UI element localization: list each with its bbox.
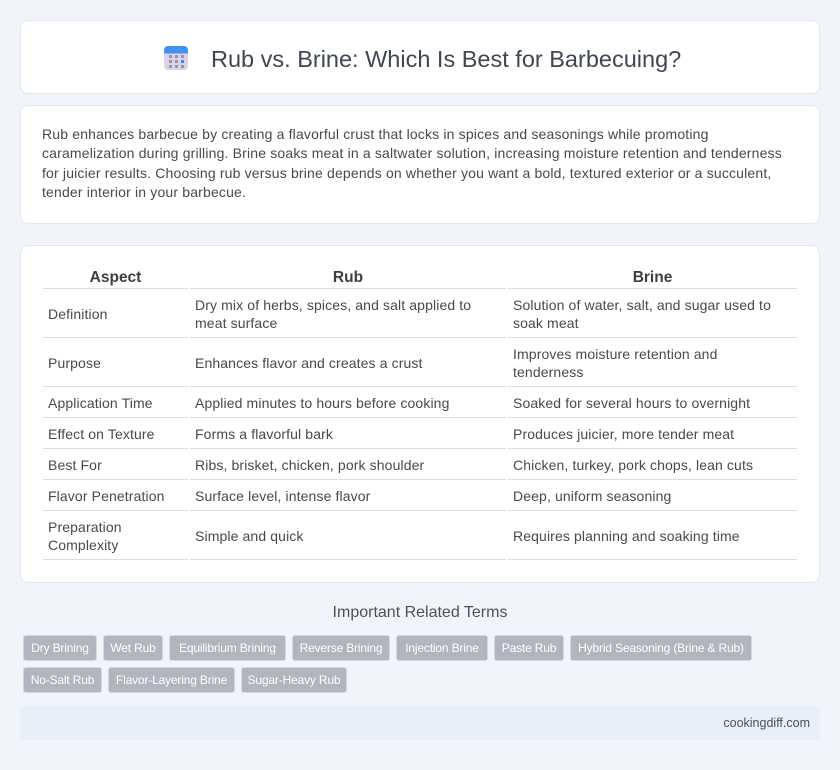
intro text: tender interior in your barbecue. [42, 184, 246, 200]
brine definition: Solution of water, salt, and sugar used to [513, 297, 771, 313]
rub definition: Dry mix of herbs, spices, and salt applied to [195, 297, 471, 313]
tag [292, 635, 390, 661]
brine definition: soak meat [513, 315, 579, 331]
rub best for: Ribs, brisket, chicken, pork shoulder [195, 457, 424, 473]
rub definition: meat surface [195, 315, 277, 331]
row: Best For: Best For [48, 457, 102, 473]
tag [494, 635, 564, 661]
row: Effect on Texture: Effect on Texture [48, 426, 155, 442]
rub definition [195, 297, 471, 331]
title: Rub vs. Brine: Which Is Best for Barbecuing? [211, 46, 681, 72]
tag [108, 667, 235, 693]
header: Rub: Rub [333, 269, 363, 286]
intro panel [20, 105, 820, 224]
tag: Reverse Brining [300, 641, 382, 655]
related terms heading: Important Related Terms [333, 604, 507, 621]
rub effect on texture: Forms a flavorful bark [195, 426, 333, 442]
row: Definition: Definition [48, 306, 108, 322]
title card [20, 20, 820, 94]
row: Application Time: Application Time [48, 395, 153, 411]
intro text: Rub enhances barbecue by creating a flavorful crust that locks in spices and seasonings while promoting [42, 126, 709, 142]
header: Aspect: Aspect [90, 269, 141, 286]
brine best for: Chicken, turkey, pork chops, lean cuts [513, 457, 753, 473]
rub preparation complexity: Simple and quick [195, 528, 304, 544]
footer source: cookingdiff.com [723, 716, 810, 730]
row: Preparation Complexity: Preparation [48, 519, 122, 535]
tag: Paste Rub [502, 641, 556, 655]
comparison table panel [20, 245, 820, 583]
row: Preparation Complexity [48, 519, 122, 553]
brine application time: Soaked for several hours to overnight [513, 395, 750, 411]
tag [570, 635, 752, 661]
tag: Dry Brining [31, 641, 89, 655]
rub flavor penetration: Surface level, intense flavor [195, 488, 370, 504]
rub purpose: Enhances flavor and creates a crust [195, 355, 423, 371]
tag: Flavor-Layering Brine [116, 673, 227, 687]
icon: calendar [164, 46, 188, 70]
brine preparation complexity: Requires planning and soaking time [513, 528, 740, 544]
footer bar [20, 706, 820, 740]
tag [23, 635, 97, 661]
tag: Injection Brine [405, 641, 479, 655]
tag [396, 635, 488, 661]
brine purpose [513, 346, 718, 380]
brine flavor penetration: Deep, uniform seasoning [513, 488, 671, 504]
rub application time: Applied minutes to hours before cooking [195, 395, 450, 411]
tag: Hybrid Seasoning (Brine & Rub) [578, 641, 744, 655]
row: Purpose: Purpose [48, 355, 101, 371]
row: Preparation Complexity: Complexity [48, 537, 118, 553]
brine purpose: tenderness [513, 364, 583, 380]
brine purpose: Improves moisture retention and [513, 346, 718, 362]
brine definition [513, 297, 771, 331]
intro text: caramelization during grilling. Brine soaks meat in a saltwater solution, increasing moisture retention and tenderness [42, 145, 782, 161]
tag: No-Salt Rub [31, 673, 94, 687]
row: Flavor Penetration: Flavor Penetration [48, 488, 165, 504]
tag: Equilibrium Brining [179, 641, 276, 655]
intro text [42, 126, 782, 200]
tag: Sugar-Heavy Rub [248, 673, 340, 687]
tag [241, 667, 347, 693]
related terms tags [23, 635, 752, 693]
intro text: for juicier results. Choosing rub versus brine depends on whether you want a bold, textured exterior or a succulent, [42, 165, 771, 181]
tag [23, 667, 102, 693]
header: Brine: Brine [633, 269, 672, 286]
tag [169, 635, 286, 661]
brine effect on texture: Produces juicier, more tender meat [513, 426, 734, 442]
tag: Wet Rub [110, 641, 156, 655]
tag [103, 635, 163, 661]
